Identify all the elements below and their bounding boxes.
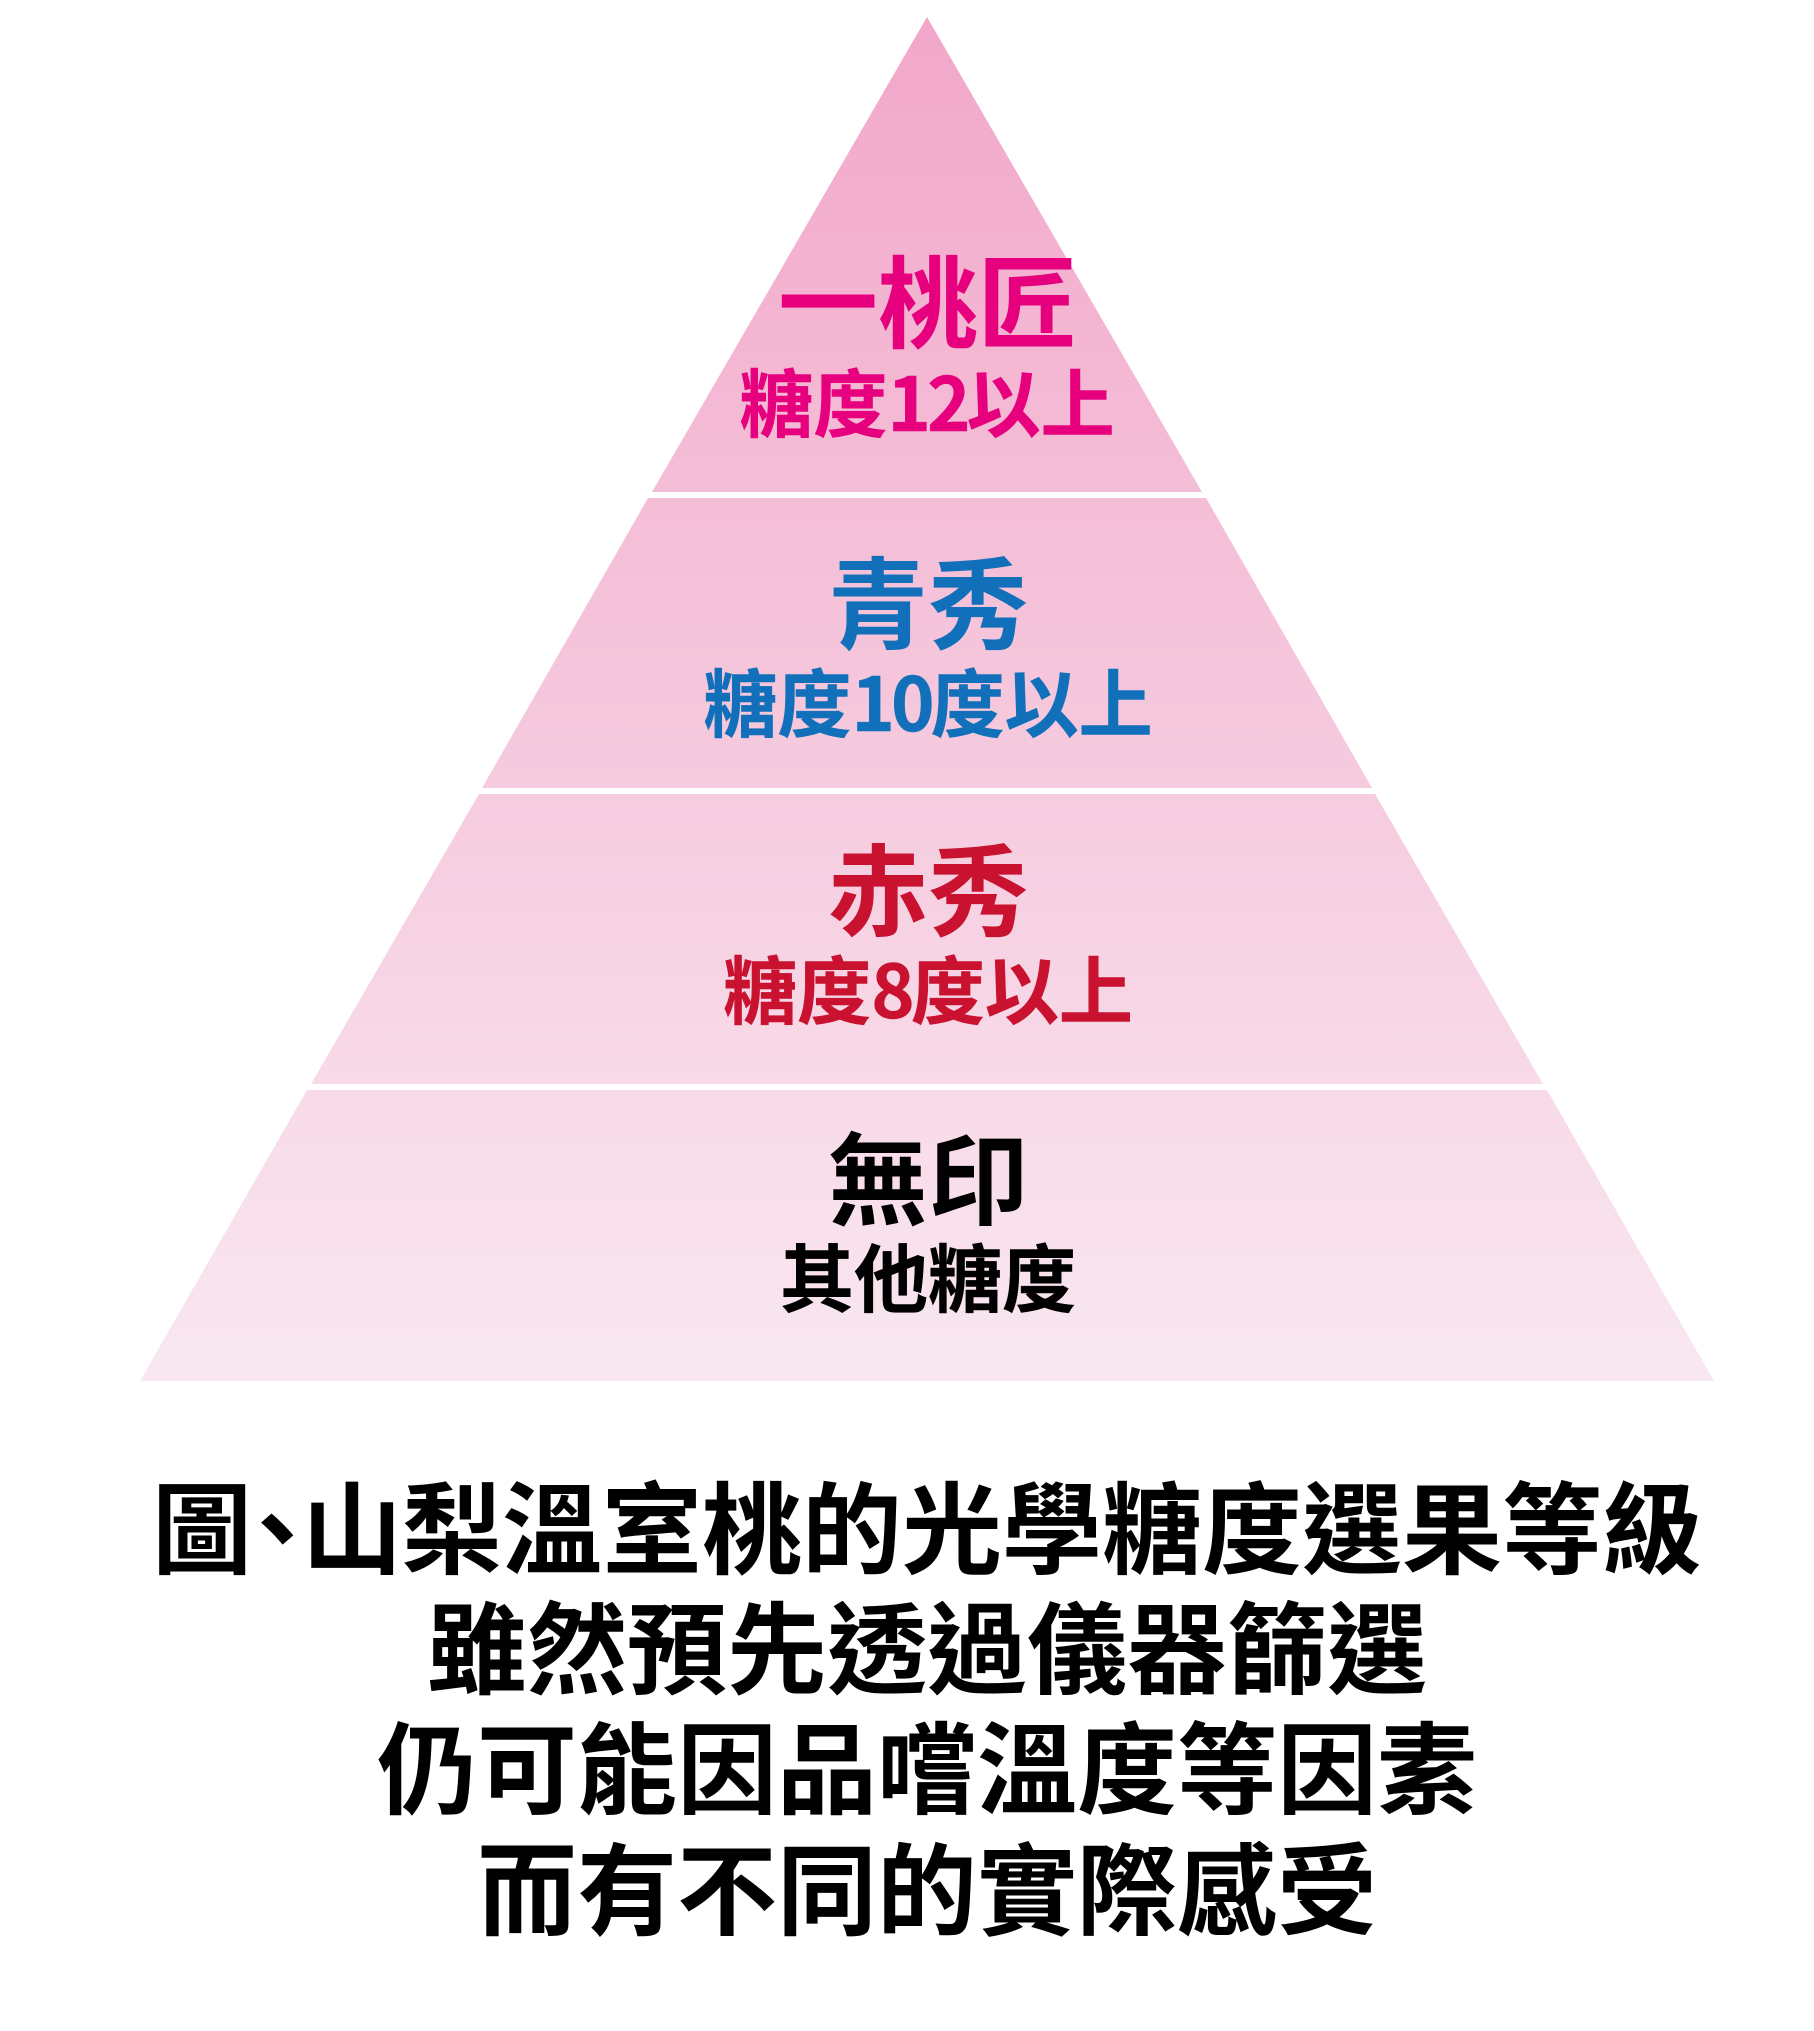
- caption text: 仍可能因品嚐溫度等因素: [377, 1690, 1477, 1835]
- tier 3: 赤秀: 糖度8度以上: [723, 933, 1133, 1040]
- tier 2: 青秀: [482, 498, 1372, 788]
- tier 1: 一桃匠: [652, 17, 1202, 492]
- tier 2: 青秀: 糖度10度以上: [703, 646, 1153, 753]
- tier 4: 無印: 其他糖度: [780, 1221, 1076, 1328]
- caption text: [152, 1450, 1702, 1956]
- caption text: 圖、山梨溫室桃的光學糖度選果等級: [152, 1450, 1702, 1595]
- pyramid chart: [140, 17, 1714, 1381]
- caption text: 雖然預先透過儀器篩選: [427, 1570, 1427, 1715]
- tier 3: 赤秀: [311, 794, 1543, 1084]
- tier 4: 無印: 無印: [828, 1101, 1028, 1246]
- caption text: 而有不同的實際感受: [477, 1811, 1377, 1956]
- tier 3: 赤秀: 赤秀: [828, 812, 1028, 957]
- tier 1: 一桃匠: 一桃匠: [778, 224, 1078, 369]
- tier 4: 無印: [140, 1090, 1714, 1381]
- tier 1: 一桃匠: 糖度12以上: [739, 346, 1115, 453]
- tier 2: 青秀: 青秀: [828, 525, 1028, 670]
